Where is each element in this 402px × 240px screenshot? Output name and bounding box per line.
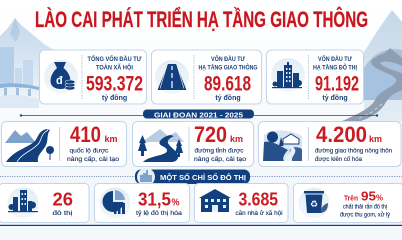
label — [313, 53, 357, 72]
description: chất thải rắn đô thị — [343, 202, 387, 210]
heading: period 2021-2025: GIAI ĐOẠN 2021 - 2025 — [154, 112, 243, 119]
description: tỷ lệ đô thị hóa — [136, 210, 183, 217]
label: VỐN ĐẦU TƯ — [211, 53, 246, 63]
panel: urbanization rate — [94, 184, 190, 222]
description: nâng cấp, cải tạo — [194, 154, 247, 163]
value: 4.200 — [316, 122, 367, 147]
icon: city — [8, 188, 38, 218]
icon: winding road — [5, 129, 54, 162]
heading: period 2021-2025 — [143, 110, 254, 119]
description: nâng cấp, cải tạo — [67, 154, 120, 163]
description: đô thị — [52, 210, 72, 217]
description: được kiên cố hóa — [315, 154, 362, 163]
value: 3.685 — [238, 190, 278, 210]
description: quốc lộ được — [70, 146, 108, 154]
icon: road — [155, 60, 189, 94]
unit: km — [369, 134, 382, 144]
description — [315, 148, 392, 163]
icon: rural house and road — [263, 130, 302, 161]
panel: 26 urban areas — [0, 184, 89, 222]
heading: urban indicators — [135, 168, 250, 186]
unit: tỷ đồng — [215, 93, 241, 102]
panel: rural roads — [258, 122, 401, 166]
description: đường giao thông nông thôn — [315, 148, 392, 154]
icon: apartment house — [199, 189, 231, 212]
unit: km — [104, 134, 118, 144]
label: TỔNG VỐN ĐẦU TƯ — [88, 53, 142, 63]
value: 593.372 — [86, 72, 143, 96]
value: 410 — [70, 122, 101, 147]
icon: money bag: đ — [56, 75, 63, 87]
label: TOÀN XÃ HỘI — [96, 62, 133, 72]
unit: tỷ đồng — [322, 93, 348, 102]
icon: pie and bar chart — [100, 188, 130, 218]
panel: transport infrastructure investment — [152, 50, 262, 104]
icon: road with pines — [138, 129, 184, 162]
value: 91.192 — [315, 72, 359, 96]
panel: social housing — [194, 184, 288, 222]
label — [198, 53, 258, 72]
label: HẠ TẦNG GIAO THÔNG — [198, 62, 258, 72]
panel: urban infrastructure investment — [266, 50, 364, 104]
unit: % — [172, 198, 180, 208]
icon: buildings — [271, 58, 305, 92]
label — [88, 53, 142, 72]
description — [340, 202, 391, 218]
lead-in: Trên — [344, 196, 358, 202]
background: mountain and city, left — [0, 18, 54, 108]
value: 720 — [194, 122, 227, 147]
label: HẠ TẦNG ĐÔ THỊ — [313, 62, 357, 72]
panel: solid waste collection — [294, 184, 402, 222]
description — [194, 146, 247, 163]
panel: national roads — [2, 122, 126, 166]
value: 26 — [52, 190, 73, 210]
panel: provincial roads — [132, 122, 254, 166]
icon: recycling bin: ♻ — [310, 199, 318, 209]
value: 31,5 — [138, 190, 171, 210]
unit: km — [230, 134, 243, 144]
description: đường tỉnh được — [194, 146, 244, 154]
description — [67, 146, 120, 163]
description: căn nhà ở xã hội — [236, 209, 282, 217]
label: VỐN ĐẦU TƯ — [318, 53, 353, 63]
unit: % — [376, 194, 383, 202]
value: 95 — [361, 188, 376, 204]
panel: total social investment — [40, 50, 146, 104]
unit: tỷ đồng — [102, 93, 127, 102]
background: mountains and winding road, right — [340, 10, 402, 122]
heading: urban indicators: MỘT SỐ CHỈ SỐ ĐÔ THỊ — [160, 172, 246, 182]
description: được thu gom, xử lý — [340, 210, 391, 218]
value: 89.618 — [204, 72, 251, 96]
